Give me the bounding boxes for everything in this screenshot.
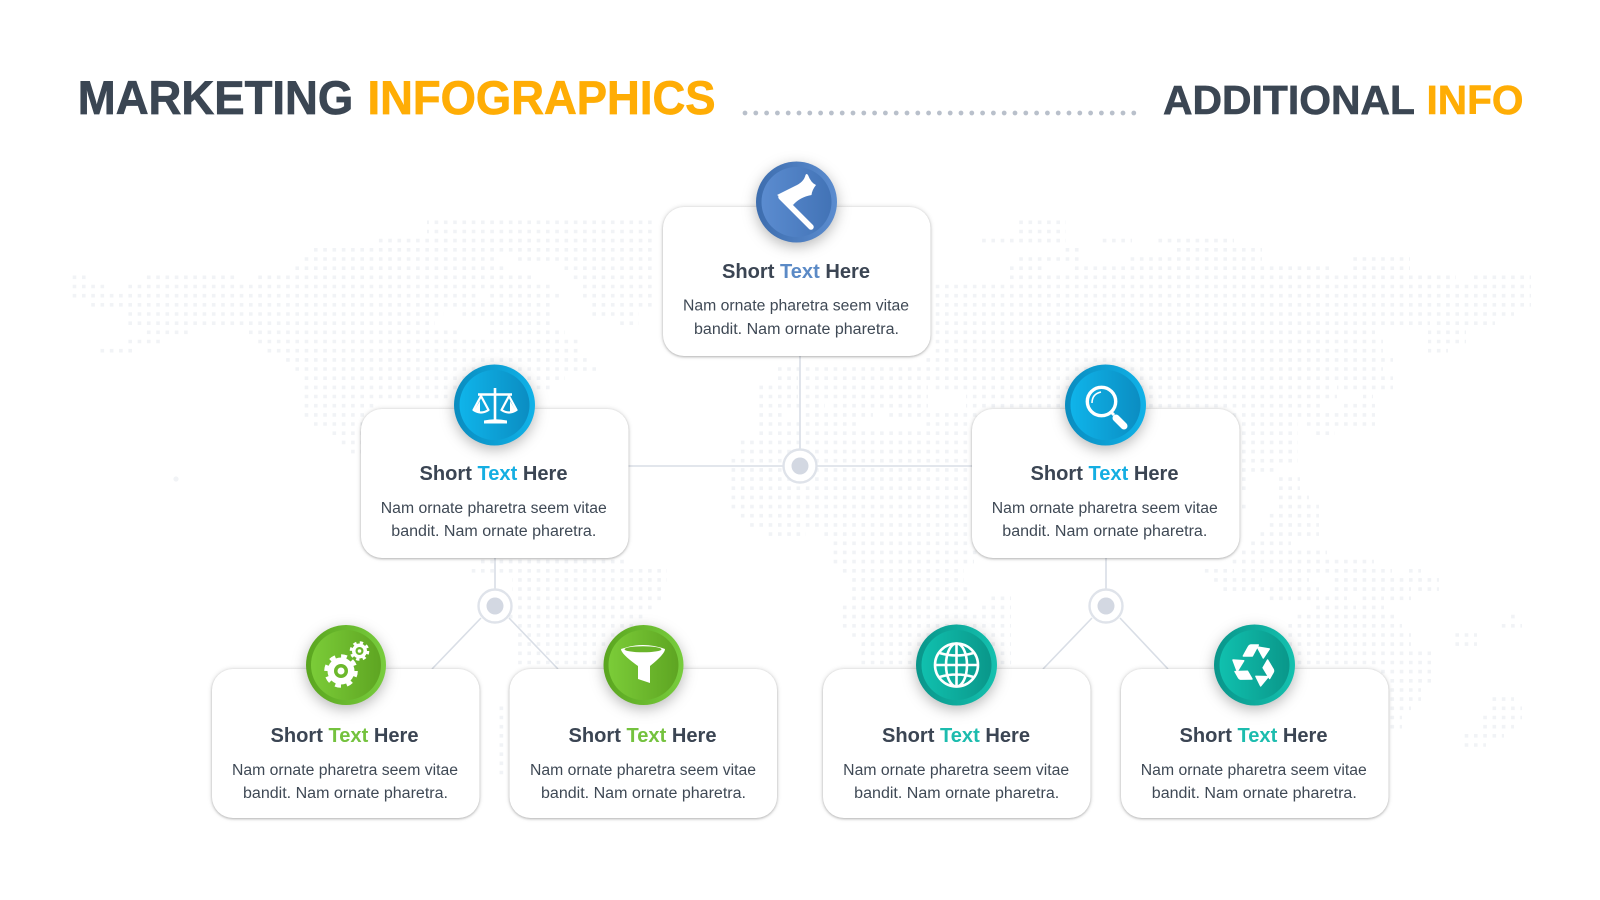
heading: marketing infographics: INFOGRAPHICS <box>368 71 716 124</box>
heading: marketing infographics <box>78 71 716 124</box>
card heading: Short Text Here <box>420 463 568 485</box>
heading: marketing infographics: MARKETING <box>78 71 353 124</box>
panel: middle right card <box>972 364 1240 558</box>
card body text: bandit. Nam ornate pharetra. <box>243 785 448 802</box>
panel: bottom card 4 <box>1121 624 1388 818</box>
connector node: center <box>784 450 816 482</box>
card body text <box>1141 762 1367 802</box>
card body text <box>843 762 1069 802</box>
card body text: Nam ornate pharetra seem vitae <box>1141 762 1367 779</box>
panel: top card <box>663 162 930 356</box>
panel: middle left card <box>361 364 628 558</box>
heading: additional info: ADDITIONAL <box>1163 77 1415 123</box>
panel: bottom card 3 <box>823 624 1090 818</box>
card body text: Nam ornate pharetra seem vitae <box>232 762 458 779</box>
card body text: Nam ornate pharetra seem vitae <box>683 298 909 314</box>
card body text: bandit. Nam ornate pharetra. <box>694 321 899 338</box>
card heading: Short Text Here <box>270 725 418 747</box>
card body text <box>992 500 1218 540</box>
card heading: Short Text Here <box>882 725 1030 747</box>
connector node: lower right <box>1090 590 1122 622</box>
card body text <box>232 762 458 802</box>
card heading: Short Text Here <box>568 725 716 747</box>
card body text: bandit. Nam ornate pharetra. <box>541 785 746 802</box>
dotted divider <box>745 111 1141 115</box>
world map dot background <box>73 222 1532 773</box>
icon: flag <box>756 162 837 242</box>
card body text <box>683 298 909 338</box>
card body text: bandit. Nam ornate pharetra. <box>854 785 1059 802</box>
connector node: lower left <box>478 590 512 622</box>
icon: recycle <box>1214 624 1295 706</box>
connector lines between cards <box>432 356 1168 669</box>
heading: additional info: INFO <box>1426 77 1524 123</box>
card body text: bandit. Nam ornate pharetra. <box>1152 785 1357 802</box>
icon: funnel <box>604 625 684 705</box>
card heading: Short Text Here <box>1180 725 1328 747</box>
panel: bottom card 1 <box>212 625 480 818</box>
icon: globe <box>916 624 997 706</box>
card body text: Nam ornate pharetra seem vitae <box>530 762 756 779</box>
card heading: Short Text Here <box>722 261 870 283</box>
card body text: Nam ornate pharetra seem vitae <box>992 500 1218 517</box>
card heading: Short Text Here <box>1030 463 1178 485</box>
card body text: Nam ornate pharetra seem vitae <box>381 500 607 517</box>
card body text <box>381 500 607 540</box>
card body text: bandit. Nam ornate pharetra. <box>391 523 596 540</box>
panel: bottom card 2 <box>510 625 777 818</box>
card body text: bandit. Nam ornate pharetra. <box>1002 523 1207 540</box>
icon: magnifier <box>1065 364 1146 446</box>
card body text: Nam ornate pharetra seem vitae <box>843 762 1069 779</box>
card body text <box>530 762 756 802</box>
icon: scales <box>454 364 535 446</box>
icon: gears <box>306 625 386 705</box>
